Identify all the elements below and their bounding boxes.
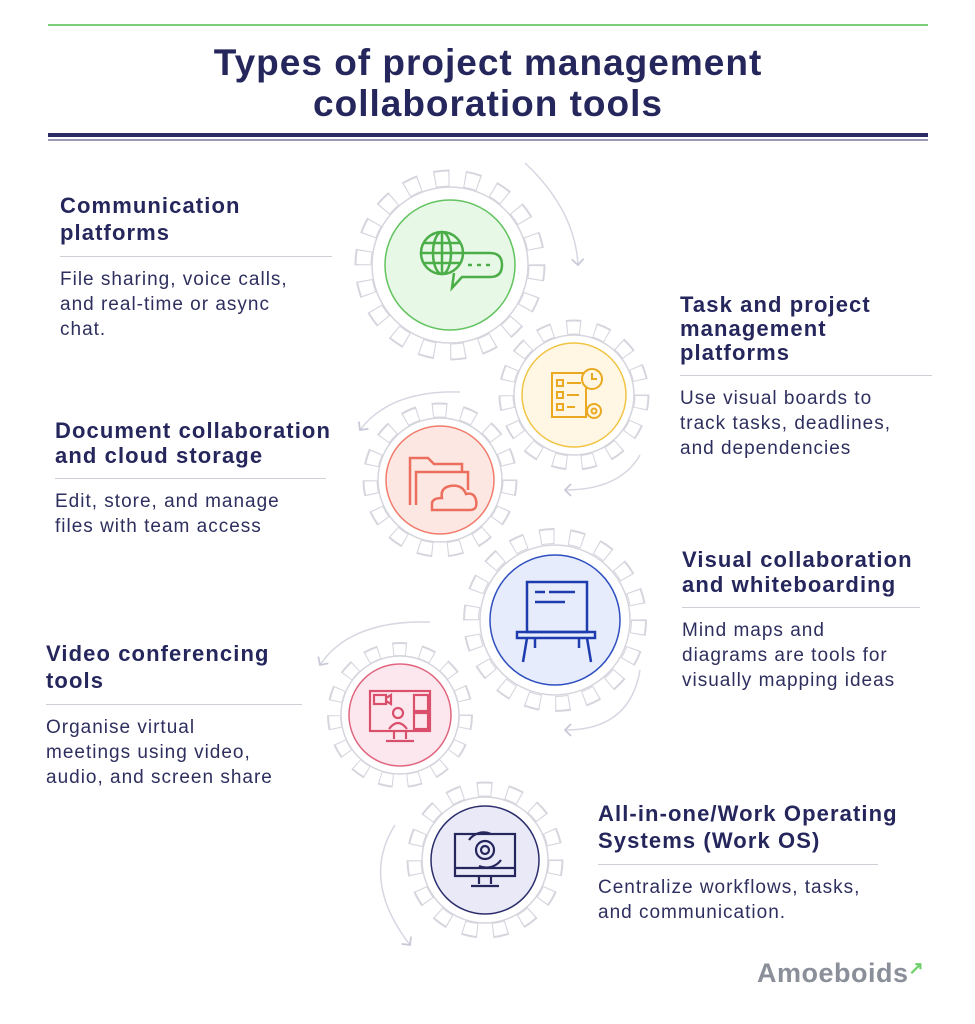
logo: Amoeboids↗	[757, 958, 924, 988]
block: visual collaboration: visually mapping ideas	[682, 670, 895, 691]
arrows	[320, 163, 640, 945]
block: task and project management: management	[680, 316, 827, 341]
block: all-in-one work os: Systems (Work OS)	[598, 828, 820, 853]
block: document collaboration	[55, 418, 331, 537]
block: all-in-one work os: All-in-one/Work Operating	[598, 801, 898, 826]
block: visual collaboration	[682, 547, 920, 691]
block: video conferencing: audio, and screen share	[46, 767, 273, 788]
block: all-in-one work os: and communication.	[598, 902, 786, 923]
icon: folder cloud	[410, 458, 476, 510]
block: task and project management: Task and project	[680, 292, 871, 317]
block: document collaboration: files with team access	[55, 516, 262, 537]
block: communication platforms: chat.	[60, 319, 106, 340]
icon: task list	[552, 369, 602, 418]
block: visual collaboration: diagrams are tools for	[682, 645, 888, 666]
gear 4 visual	[471, 536, 639, 704]
gear 2 task	[506, 327, 642, 463]
block: task and project management: Use visual boards to	[680, 388, 872, 409]
block: all-in-one work os: Centralize workflows, tasks,	[598, 877, 860, 898]
block: task and project management: platforms	[680, 340, 790, 365]
title: Types of project management	[214, 42, 762, 83]
block: visual collaboration: Mind maps and	[682, 620, 825, 641]
gear 1 communication	[363, 178, 537, 352]
block: document collaboration: and cloud storage	[55, 443, 263, 468]
block: communication platforms: platforms	[60, 220, 170, 245]
block: visual collaboration: and whiteboarding	[682, 572, 896, 597]
block: task and project management	[680, 292, 932, 459]
block: document collaboration: Edit, store, and manage	[55, 491, 280, 512]
block: all-in-one work os	[598, 801, 898, 923]
block: task and project management: and dependencies	[680, 438, 851, 459]
block: visual collaboration: Visual collaboration	[682, 547, 913, 572]
block: communication platforms: Communication	[60, 193, 241, 218]
icon: globe chat	[421, 232, 502, 288]
icon: monitor gear	[455, 832, 515, 886]
block: task and project management: track tasks, deadlines,	[680, 413, 891, 434]
block: document collaboration: Document collaboration	[55, 418, 331, 443]
gear 6 work os	[414, 789, 556, 931]
title	[48, 24, 928, 141]
block: video conferencing: meetings using video,	[46, 742, 251, 763]
block: video conferencing: Organise virtual	[46, 717, 195, 738]
title: collaboration tools	[313, 83, 663, 124]
block: communication platforms	[60, 193, 332, 340]
block: video conferencing: Video conferencing	[46, 641, 270, 666]
block: video conferencing: tools	[46, 668, 104, 693]
block: communication platforms: File sharing, voice calls,	[60, 269, 288, 290]
gear 3 document	[370, 410, 510, 550]
gear 5 video	[334, 649, 466, 781]
icon: video call	[370, 691, 430, 741]
icon: whiteboard	[517, 582, 595, 662]
block: communication platforms: and real-time or async	[60, 294, 270, 315]
block: video conferencing	[46, 641, 302, 788]
